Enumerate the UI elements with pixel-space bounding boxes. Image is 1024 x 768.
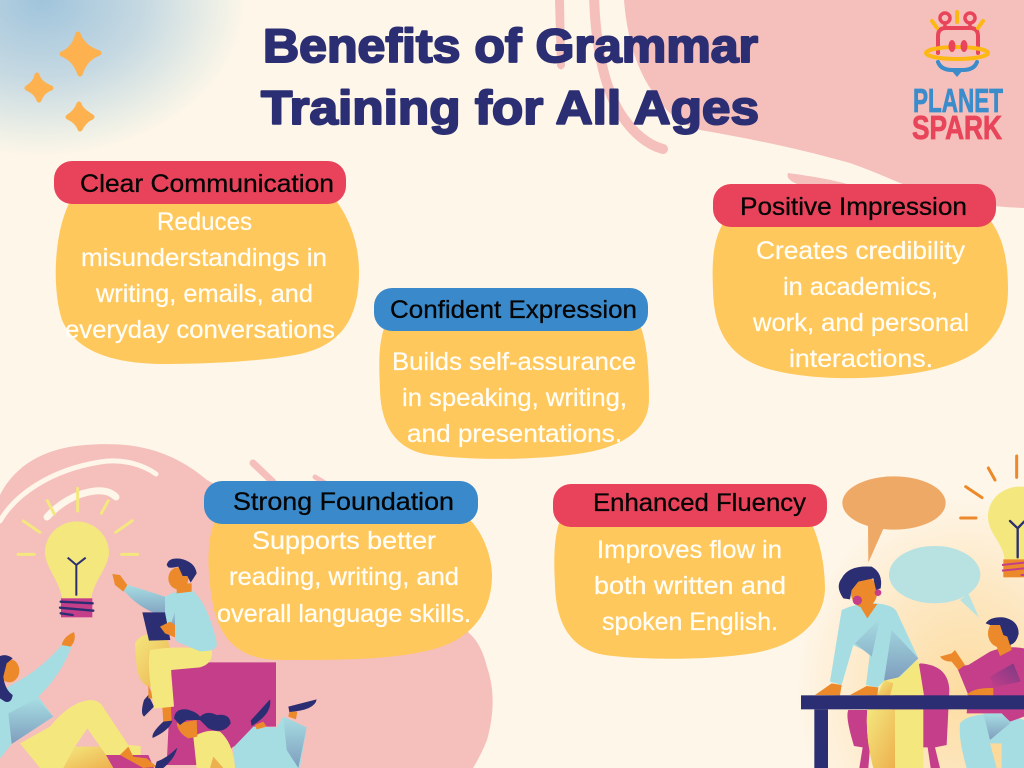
icon: left sparkle (27, 75, 51, 100)
card body (56, 198, 359, 364)
card body (713, 220, 1008, 378)
panel: Strong Foundation (204, 481, 492, 660)
card header (553, 484, 827, 527)
body text: Supports better (252, 527, 436, 555)
magenta box (167, 662, 276, 765)
body text (752, 237, 969, 373)
body text: interactions. (789, 345, 933, 373)
body text (392, 348, 636, 448)
illustration: team with lightbulb, bottom left (0, 488, 317, 768)
body text: both written and (594, 572, 786, 600)
figure: reclining woman (0, 632, 177, 768)
heading: Positive Impression (740, 193, 967, 221)
panel: Positive Impression (713, 184, 1008, 378)
table (801, 695, 1024, 768)
logo: Planet Spark (912, 12, 1003, 146)
logo: Planet Spark: SPARK (912, 109, 1002, 146)
body text: spoken English. (602, 608, 778, 636)
heading: Strong Foundation (233, 488, 454, 516)
body text: and presentations. (407, 420, 622, 448)
title: Benefits of Grammar (263, 19, 758, 72)
body text: work, and personal (752, 309, 969, 337)
body text: overall language skills. (217, 600, 471, 628)
body text: everyday conversations. (65, 316, 342, 344)
figure: woman lying on stomach (174, 699, 317, 768)
illustration: conversation at table, bottom right (801, 456, 1024, 768)
body text (217, 527, 471, 628)
panel: Enhanced Fluency (553, 484, 827, 659)
chair (847, 663, 949, 768)
body text (65, 208, 342, 344)
icon: lightbulb right (961, 456, 1024, 577)
background gradient: bottom-right peach glow (790, 490, 1024, 768)
body text: Builds self-assurance (392, 348, 636, 376)
heading: Enhanced Fluency (593, 489, 807, 517)
icon: lower sparkle (68, 104, 92, 129)
card body (208, 520, 492, 660)
decorative sparkles (27, 34, 99, 129)
title (261, 19, 759, 134)
card body (554, 520, 825, 659)
panel: Confident Expression (374, 288, 649, 459)
card header (54, 161, 346, 204)
background shape: top-right pink blob (555, 0, 1024, 208)
body text: Creates credibility (756, 237, 966, 265)
card body (379, 325, 649, 459)
title: Training for All Ages (261, 81, 759, 134)
figure: seated man (940, 617, 1024, 768)
card header (713, 184, 996, 227)
body text: misunderstandings in (81, 244, 327, 272)
body text: in academics, (783, 273, 938, 301)
icon: robot planet (926, 12, 988, 77)
body text: Improves flow in (597, 536, 782, 564)
body text (594, 536, 786, 636)
background shape: bottom-left pink blob (0, 444, 493, 768)
speech bubble: blue (889, 546, 980, 618)
figure: seated man (112, 558, 217, 738)
card header (204, 481, 478, 524)
heading: Confident Expression (390, 296, 637, 324)
body text: writing, emails, and (95, 280, 313, 308)
figure: standing woman (815, 566, 924, 768)
speech bubble: orange (842, 476, 946, 563)
body text: in speaking, writing, (402, 384, 627, 412)
background gradient: top-left blue glow (0, 0, 260, 170)
icon: large sparkle (62, 34, 99, 74)
icon: lightbulb (18, 488, 138, 617)
heading: Clear Communication (80, 170, 334, 198)
figure arm overlapping card (175, 595, 217, 651)
body text: Reduces (157, 208, 252, 236)
card header (374, 288, 648, 331)
panel: Clear Communication (54, 161, 359, 364)
body text: reading, writing, and (229, 563, 459, 591)
